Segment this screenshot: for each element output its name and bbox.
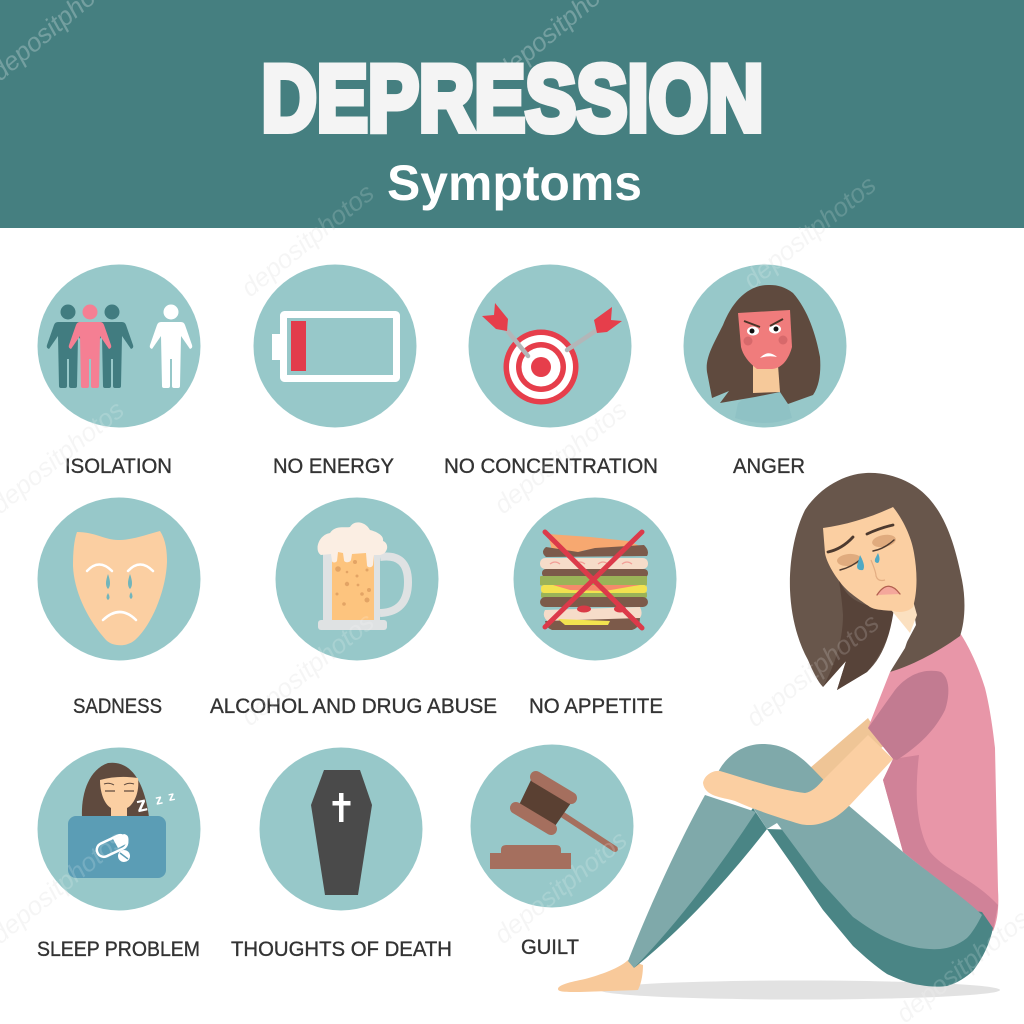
face [823,507,916,612]
icon: coffin [260,748,422,910]
illustration: sad woman sitting [558,473,1000,1000]
eyelid right [871,533,897,549]
label: thoughts of death: THOUGHTS OF DEATH [231,938,452,961]
icon: sleeping woman with pills: z [134,792,149,817]
icon: sleeping woman with pills: z [167,788,177,804]
icon: beer mug [276,498,438,660]
neck gap [866,600,916,676]
label: sadness: SADNESS [73,695,162,718]
label: alcohol and drug abuse: ALCOHOL AND DRUG ABUSE [210,695,497,718]
header banner [0,0,1024,228]
text: depositphotos [488,394,633,520]
text: depositphotos [235,606,380,732]
text: depositphotos [488,394,633,520]
shin light [628,795,756,968]
text: depositphotos [235,177,380,303]
shin dark [634,808,767,968]
label: no appetite: NO APPETITE [529,695,663,718]
shirt [868,633,998,931]
icon: sleeping woman with pills [38,748,200,910]
text: depositphotos [737,169,882,295]
text: depositphotos [235,177,380,303]
icon: angry woman [684,264,846,428]
far arm [810,718,885,792]
thigh light [716,744,982,949]
title: DEPRESSION [262,46,764,150]
text: depositphotos [737,169,882,295]
mouth [877,586,900,595]
label: sleep problem: SLEEP PROBLEM [37,938,200,961]
subtitle: Symptoms [387,155,642,211]
eye lines and brows [828,525,894,570]
tears [857,555,864,570]
icon: target with missed arrows [468,264,632,428]
thigh dark [767,829,993,987]
label: no energy: NO ENERGY [273,455,394,478]
label: isolation: ISOLATION [65,455,172,478]
icon: sleeping woman with pills: z [154,791,164,808]
label: anger: ANGER [733,455,805,478]
floor shadow [600,980,1000,1000]
shirt shading [883,755,998,931]
eyelid left [837,553,861,567]
label: guilt: GUILT [521,936,579,959]
text: depositphotos [488,824,633,950]
hair shadow [823,575,895,690]
icon: sad mask [38,498,200,660]
text: depositphotos [488,824,633,950]
shirt sleeve shading [868,671,948,760]
label: no concentration: NO CONCENTRATION [444,455,658,478]
icon: low battery [254,264,416,428]
text: depositphotos [740,607,885,733]
icon: crossed-out burger [514,498,676,660]
hair back [790,473,964,690]
near arm [703,735,893,825]
icon: isolation [38,264,200,428]
text: depositphotos [235,606,380,732]
nose [871,560,885,580]
text: depositphotos [740,607,885,733]
foot [558,960,643,992]
icon: judge gavel [470,744,634,908]
